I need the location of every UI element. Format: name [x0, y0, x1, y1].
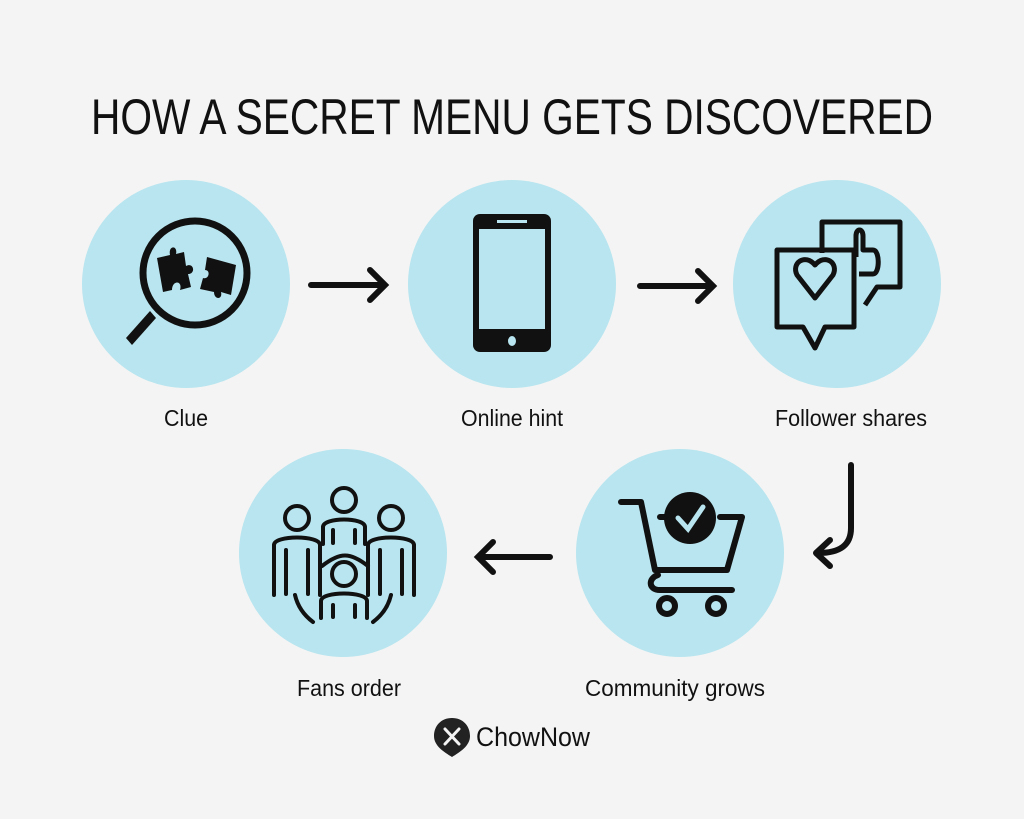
label: fans order: Fans order: [297, 675, 401, 701]
icon: group of people: [274, 488, 414, 622]
label: follower shares: Follower shares: [775, 405, 927, 431]
icon: speech bubbles: [777, 222, 900, 348]
label: community grows: Community grows: [585, 675, 765, 701]
step: online hint: [408, 180, 616, 431]
step: community grows: [576, 449, 784, 701]
logo: ChowNow: [434, 718, 590, 757]
arrow 3: curved down-left: [816, 465, 851, 566]
step: fans order: [239, 449, 447, 701]
step: clue: [82, 180, 290, 431]
icon: magnifier with puzzle: [126, 221, 247, 345]
step: follower shares: [733, 180, 941, 431]
logo: ChowNow: ChowNow: [476, 722, 590, 752]
arrow 1: [311, 270, 385, 300]
label: clue: Clue: [164, 405, 208, 431]
icon: phone: [473, 214, 551, 352]
icon: logo pin: [434, 718, 470, 757]
icon: cart with check: [621, 492, 742, 614]
arrow 2: [640, 271, 713, 301]
arrow 4: [478, 542, 550, 572]
label: online hint: Online hint: [461, 405, 564, 431]
